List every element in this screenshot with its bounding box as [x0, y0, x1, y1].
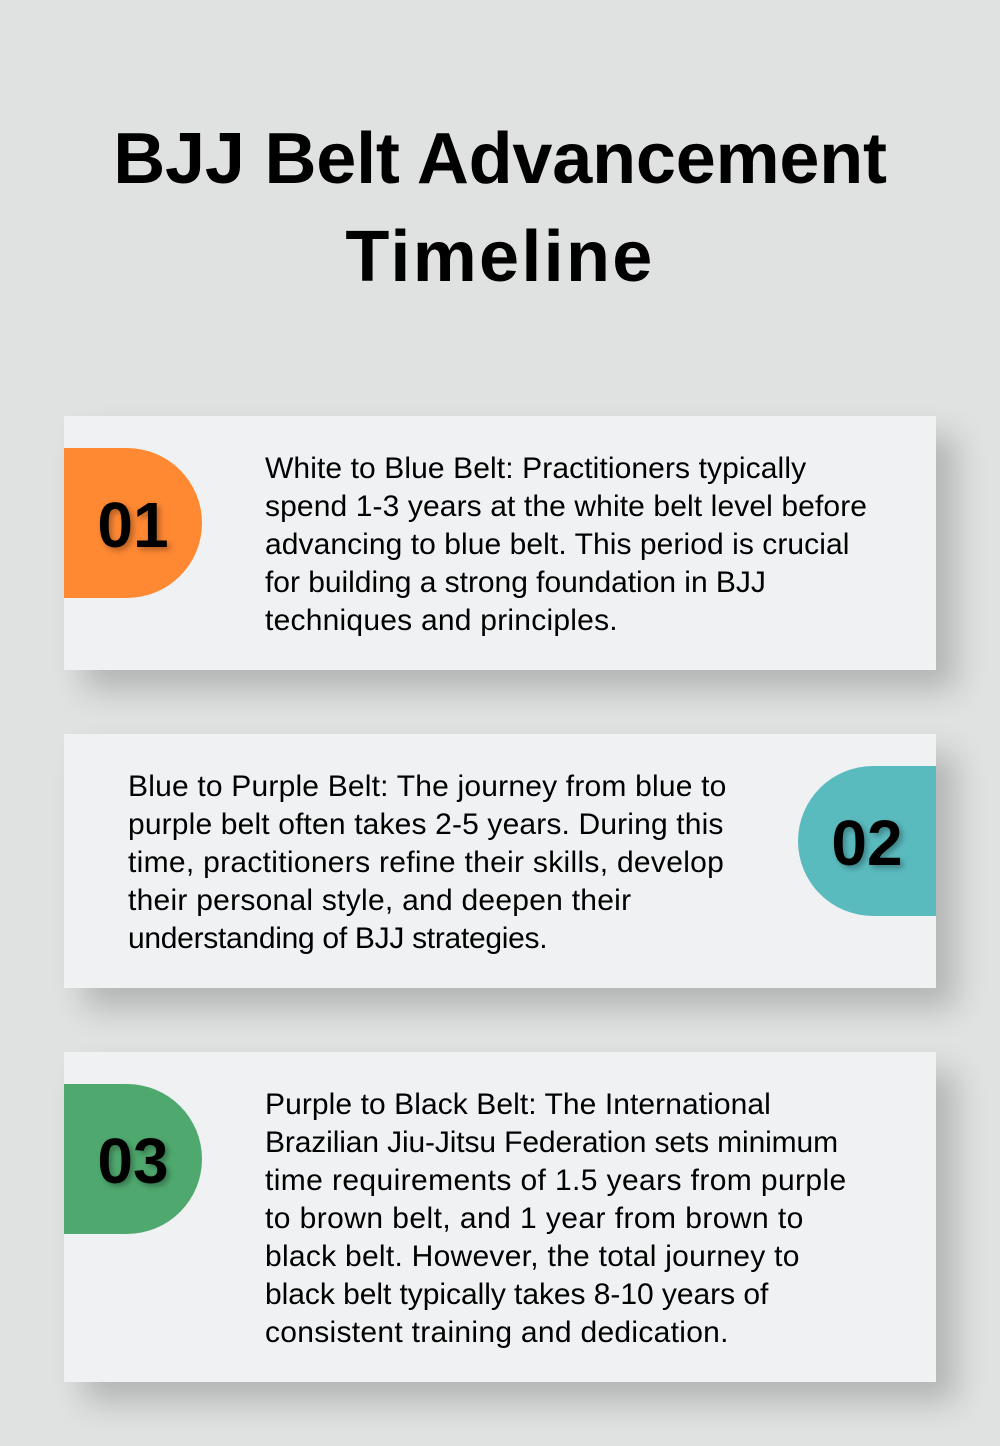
- panel: step 02 blue to purple belt: [64, 734, 936, 988]
- text: step 02 description: their personal style, and deepen their: [128, 884, 631, 917]
- text: step 01 description: for building a strong foundation in BJJ: [265, 566, 766, 599]
- text: step 03 description: consistent training and dedication.: [265, 1316, 729, 1349]
- text: step 02 description: time, practitioners refine their skills, develop: [128, 846, 724, 879]
- panel: step 01 white to blue belt: [64, 416, 936, 670]
- text: step 03 description: time requirements of 1.5 years from purple: [265, 1164, 847, 1197]
- text: step 02 description: [128, 770, 727, 955]
- text: step 02 description: understanding of BJJ strategies.: [128, 922, 547, 955]
- text: step 01 description: advancing to blue belt. This period is crucial: [265, 528, 849, 561]
- badge: 02: [798, 766, 936, 916]
- text: step 02 description: Blue to Purple Belt: The journey from blue to: [128, 770, 727, 803]
- text: step 03 description: black belt typically takes 8-10 years of: [265, 1278, 768, 1311]
- panel: step 03 purple to black belt: [64, 1052, 936, 1382]
- text: step 02 description: purple belt often takes 2-5 years. During this: [128, 808, 724, 841]
- title: Timeline: [345, 217, 655, 297]
- text: step 03 description: Purple to Black Belt: The International: [265, 1088, 771, 1121]
- text: step 01 description: techniques and principles.: [265, 604, 618, 637]
- text: step 01 description: White to Blue Belt: Practitioners typically: [265, 452, 806, 485]
- text: step 03 description: [265, 1088, 847, 1349]
- badge: 01: 01: [97, 489, 169, 561]
- badge: 02: 02: [831, 807, 903, 879]
- text: step 03 description: black belt. However, the total journey to: [265, 1240, 800, 1273]
- badge: 03: 03: [97, 1125, 169, 1197]
- text: step 01 description: [265, 452, 867, 637]
- badge: 01: [64, 448, 202, 598]
- badge: 03: [64, 1084, 202, 1234]
- text: step 03 description: Brazilian Jiu-Jitsu Federation sets minimum: [265, 1126, 838, 1159]
- text: step 01 description: spend 1-3 years at the white belt level before: [265, 490, 867, 523]
- title: BJJ Belt Advancement: [113, 119, 887, 199]
- text: step 03 description: to brown belt, and 1 year from brown to: [265, 1202, 804, 1235]
- title: [113, 119, 887, 297]
